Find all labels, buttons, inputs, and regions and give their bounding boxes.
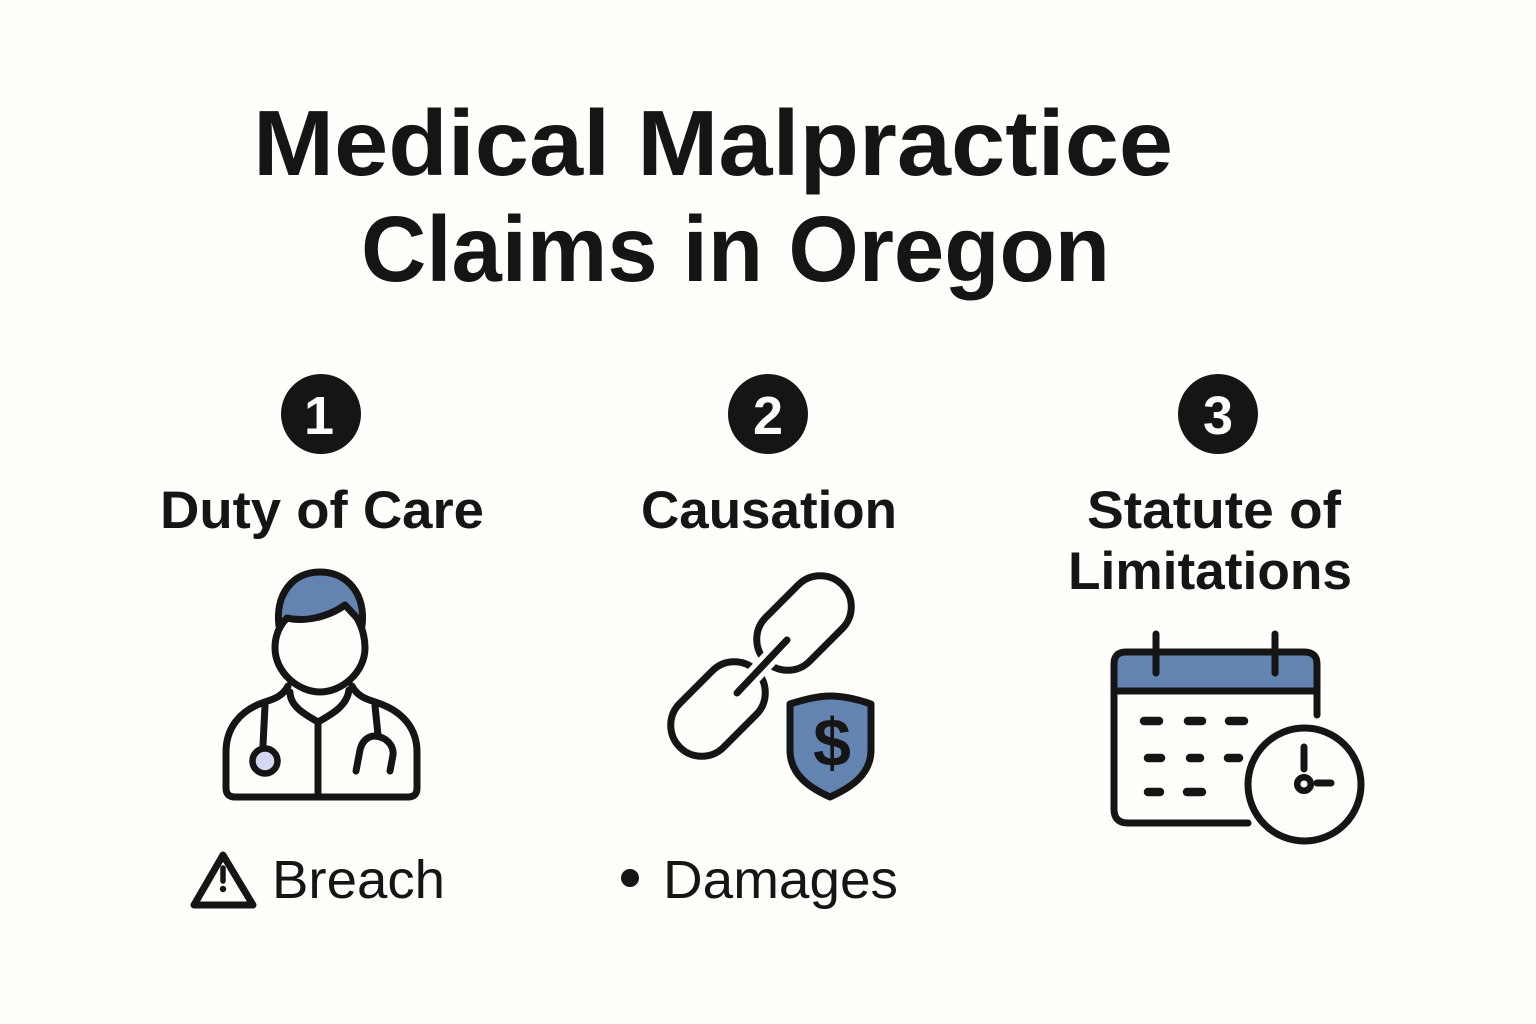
heading: statute of limitations: Statute of xyxy=(1087,481,1341,540)
number badge 1 xyxy=(281,374,361,454)
icon: warning triangle xyxy=(194,855,253,905)
label: breach: Breach xyxy=(272,850,445,910)
icon: bullet xyxy=(621,869,639,887)
heading: causation: Causation xyxy=(641,481,897,540)
number badge 2: 2 xyxy=(753,386,783,446)
label: damages: Damages xyxy=(663,850,898,910)
heading: statute of limitations: Limitations xyxy=(1068,542,1352,601)
heading: duty of care: Duty of Care xyxy=(160,481,484,540)
title xyxy=(253,91,1173,301)
number badge 3: 3 xyxy=(1203,386,1233,446)
panel: statute of limitations xyxy=(1068,374,1361,841)
panel: causation xyxy=(621,374,898,910)
icon: chain links xyxy=(658,563,864,769)
number badge 1: 1 xyxy=(304,386,334,446)
number badge 2 xyxy=(728,374,808,454)
number badge 3 xyxy=(1178,374,1258,454)
title: Medical Malpractice xyxy=(253,91,1173,195)
icon: shield with dollar sign: $ xyxy=(813,705,851,781)
panel: duty of care xyxy=(160,374,484,910)
icon: shield with dollar sign xyxy=(790,696,871,797)
icon: calendar with clock xyxy=(1114,634,1361,841)
title: Claims in Oregon xyxy=(361,197,1110,301)
icon: doctor with stethoscope xyxy=(226,572,417,797)
heading: statute of limitations xyxy=(1068,481,1352,601)
